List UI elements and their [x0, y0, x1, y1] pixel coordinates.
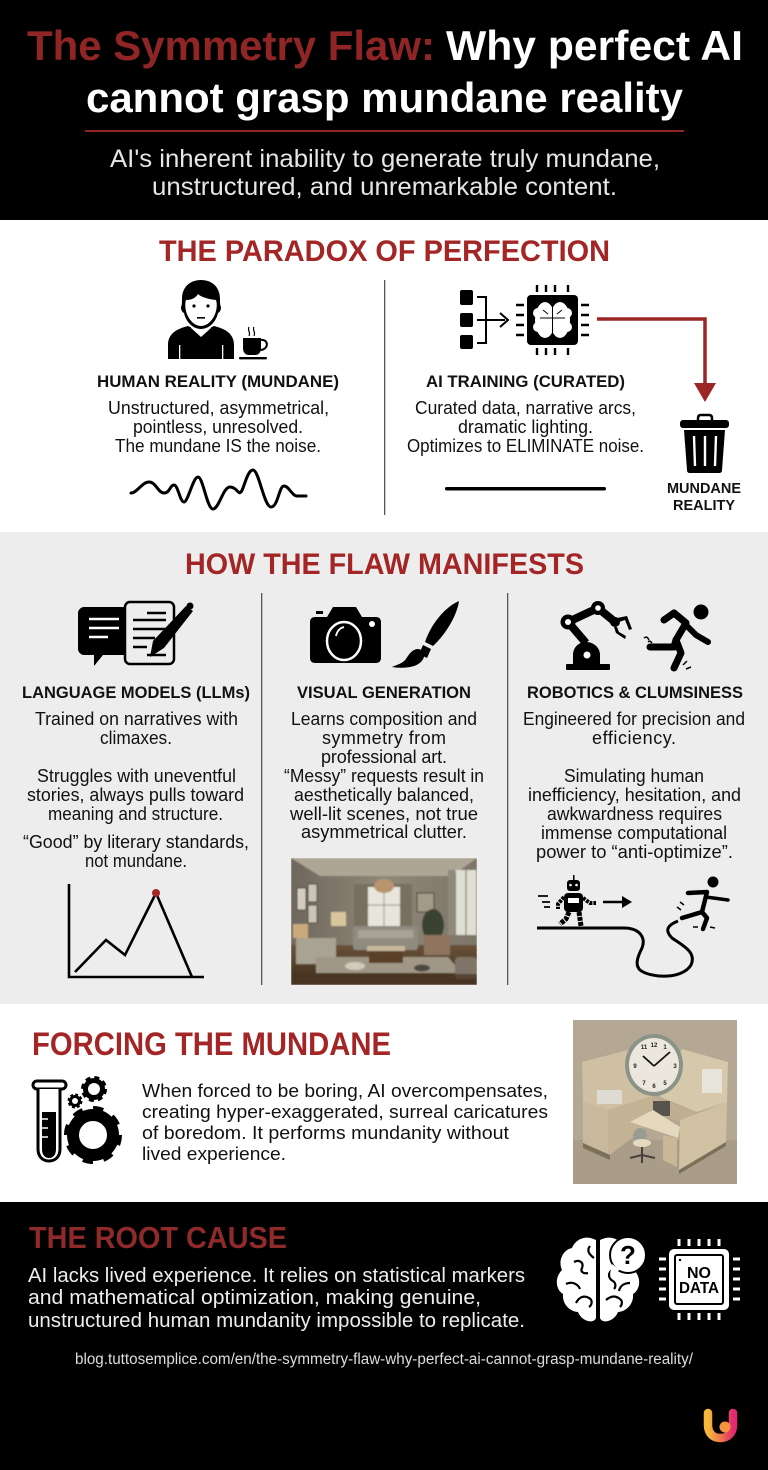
icon: trash can: [680, 415, 729, 473]
column text: “Messy” requests result in: [284, 766, 484, 786]
image: cubicle with clock: 9: [633, 1064, 637, 1070]
text block: unstructured human mundanity impossible to replicate.: [28, 1310, 525, 1332]
column text: climaxes.: [100, 728, 172, 748]
source url: blog.tuttosemplice.com/en/the-symmetry-flaw-why-perfect-ai-cannot-grasp-mundane-reality/: [75, 1351, 694, 1368]
flat line: [445, 487, 606, 490]
column heading: LANGUAGE MODELS (LLMs): [22, 683, 250, 702]
column text: awkwardness requires: [547, 804, 722, 824]
subtitle: unstructured, and unremarkable content.: [152, 173, 617, 201]
heading: THE PARADOX OF PERFECTION: [159, 235, 610, 268]
icon: test tube and gears: [33, 1078, 119, 1161]
right column heading: AI TRAINING (CURATED): [426, 372, 625, 391]
panel: title header: [0, 0, 768, 220]
image: cubicle with clock: 5: [663, 1081, 667, 1087]
left column text: Unstructured, asymmetrical,: [108, 398, 329, 418]
icon: chat and document: [78, 602, 194, 666]
column text: meaning and structure.: [48, 804, 223, 824]
left column text: pointless, unresolved.: [133, 417, 303, 437]
image: cubicle with clock: 1: [663, 1045, 667, 1051]
column text: Struggles with uneventful: [37, 766, 236, 786]
line chart: [69, 884, 204, 977]
column text: Simulating human: [564, 766, 704, 786]
image: cubicle with clock: 11: [641, 1045, 648, 1051]
heading: HOW THE FLAW MANIFESTS: [185, 548, 584, 581]
column text: “Good” by literary standards,: [23, 832, 249, 852]
column: visual generation: [284, 601, 484, 985]
column: robotics and clumsiness: [523, 601, 745, 976]
image: cubicle with clock: 6: [652, 1084, 656, 1090]
text block: and mathematical optimization, making genuine,: [28, 1287, 481, 1309]
column text: [284, 709, 484, 842]
column text: stories, always pulls toward: [27, 785, 244, 805]
right column text: Optimizes to ELIMINATE noise.: [407, 436, 644, 456]
icon: brain with question mark: ?: [620, 1240, 636, 1270]
right column text: [407, 398, 644, 456]
icon: person with coffee: [168, 280, 267, 359]
panel: forcing the mundane: [0, 1004, 768, 1202]
panel: the paradox of perfection: [0, 220, 768, 532]
icon: chip with no data: NO: [687, 1265, 711, 1282]
image: cubicle with clock: 12: [651, 1043, 658, 1049]
right column text: dramatic lighting.: [458, 417, 593, 437]
text block: lived experience.: [142, 1143, 286, 1164]
icon: data to chip: [460, 285, 589, 355]
diagram: robot path to stumbling figure: [537, 875, 728, 976]
column text: asymmetrical clutter.: [301, 822, 467, 842]
column text: power to “anti-optimize”.: [536, 842, 733, 862]
icon: brain inside chip: [533, 302, 572, 338]
left column text: [108, 398, 329, 456]
panel: how the flaw manifests: [0, 532, 768, 1004]
column heading: ROBOTICS & CLUMSINESS: [527, 683, 743, 702]
label: mundane reality: [667, 480, 741, 514]
column text: inefficiency, hesitation, and: [528, 785, 741, 805]
column: language models: [22, 602, 250, 977]
text block: [142, 1080, 548, 1164]
icon: chip with no data: DATA: [679, 1280, 719, 1297]
column text: immense computational: [541, 823, 727, 843]
column text: Learns composition and: [291, 709, 477, 729]
title: Why perfect AI: [446, 22, 743, 69]
arrow: to the trash: [597, 319, 716, 402]
title: cannot grasp mundane reality: [86, 74, 684, 121]
icon: brain with question mark: [557, 1237, 646, 1321]
title: [27, 22, 743, 121]
right column text: Curated data, narrative arcs,: [415, 398, 636, 418]
column text: [523, 709, 745, 862]
column text: Trained on narratives with: [35, 709, 238, 729]
image: cubicle with clock: 3: [673, 1064, 677, 1070]
icon: noisy wave: [131, 470, 306, 509]
icon: logo: [708, 1413, 733, 1438]
label: mundane reality: MUNDANE: [667, 480, 741, 497]
image: living room: [291, 858, 477, 985]
text block: When forced to be boring, AI overcompensates,: [142, 1080, 548, 1101]
image: cubicle with clock: 7: [642, 1081, 646, 1087]
image: cubicle with clock: [573, 1020, 737, 1184]
text block: of boredom. It performs mundanity without: [142, 1122, 509, 1143]
text block: [28, 1265, 525, 1332]
heading: THE ROOT CAUSE: [29, 1220, 287, 1255]
icon: robot arm and stumbling figure: [560, 601, 708, 670]
subtitle: [110, 145, 660, 201]
column text: well-lit scenes, not true: [289, 804, 478, 824]
text block: AI lacks lived experience. It relies on statistical markers: [28, 1265, 525, 1287]
column text: [23, 709, 249, 871]
left column heading: HUMAN REALITY (MUNDANE): [97, 372, 339, 391]
column text: not mundane.: [85, 851, 187, 871]
heading: FORCING THE MUNDANE: [32, 1026, 391, 1062]
column text: aesthetically balanced,: [294, 785, 474, 805]
column text: Engineered for precision and: [523, 709, 745, 729]
left column text: The mundane IS the noise.: [115, 436, 321, 456]
column heading: VISUAL GENERATION: [297, 683, 471, 702]
panel: the root cause: [0, 1202, 768, 1470]
icon: camera and brush: [310, 601, 459, 668]
label: mundane reality: REALITY: [673, 497, 735, 514]
column text: symmetry from: [322, 728, 446, 748]
column text: professional art.: [321, 747, 447, 767]
title: The Symmetry Flaw:: [27, 22, 435, 69]
icon: chip with no data: [659, 1239, 740, 1320]
column text: efficiency.: [592, 728, 676, 748]
subtitle: AI's inherent inability to generate truly mundane,: [110, 145, 660, 173]
text block: creating hyper-exaggerated, surreal caricatures: [142, 1101, 548, 1122]
